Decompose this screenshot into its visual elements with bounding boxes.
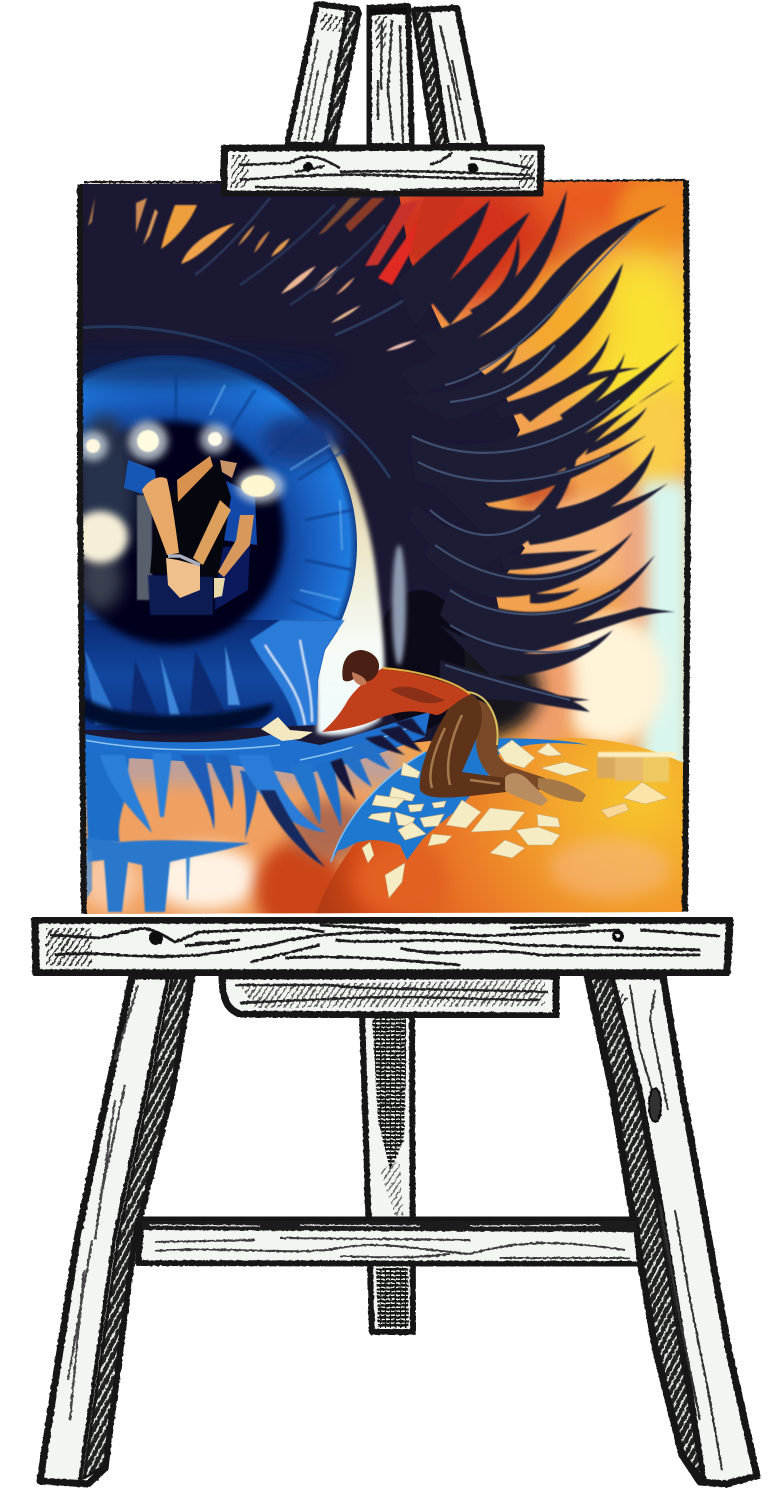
jeans (148, 575, 213, 615)
cuffed arm (142, 477, 179, 555)
iris (78, 346, 357, 732)
man: head (342, 650, 379, 681)
glare lights (72, 421, 284, 563)
globe with papers (316, 738, 684, 914)
easel: top left post (287, 4, 359, 145)
second figure: jeans (214, 545, 250, 610)
man: hand with cloth (261, 717, 313, 741)
crawling man (261, 650, 586, 806)
upper lid dark mass (70, 170, 525, 745)
painting background (78, 180, 686, 914)
easel: under shelf tray (222, 976, 556, 1016)
eyelashes (395, 190, 680, 712)
blue band and drips (84, 838, 250, 912)
hands (166, 558, 200, 598)
easel: left leg (40, 976, 192, 1484)
lower lid crease (80, 695, 273, 734)
other arm (193, 500, 231, 565)
man: near leg (420, 692, 506, 798)
lid rim highlight (392, 545, 406, 665)
lower lid skin (86, 784, 370, 914)
iris radial fibres (176, 375, 352, 620)
lower lid blue band (80, 712, 430, 775)
man: shoes (505, 773, 548, 806)
second figure: arm (218, 515, 254, 577)
easel: right post (414, 8, 485, 146)
easel: top clamp (224, 147, 541, 194)
sclera (316, 430, 384, 735)
paper sheets (362, 740, 668, 898)
second figure: blue shirt (222, 480, 257, 545)
easel: back center leg (362, 1012, 413, 1332)
blue sleeve (124, 460, 156, 494)
man: far leg (476, 700, 545, 790)
upper lid gaps showing background (88, 190, 470, 351)
globe: blue water (331, 738, 588, 862)
painting frame edges (80, 180, 688, 914)
lower lashes (84, 718, 428, 867)
upper lid lash strokes (80, 198, 418, 478)
pupil (60, 421, 284, 645)
lower iris streaks (85, 620, 345, 735)
glowing blocks (597, 752, 676, 782)
eyelash highlights (412, 220, 640, 700)
grey stripe (137, 495, 152, 600)
painting (30, 144, 734, 1018)
easel: main shelf (35, 920, 730, 973)
reflection in the pupil (72, 421, 284, 615)
easel: top center post (369, 6, 412, 146)
raised arm (177, 456, 213, 502)
easel: right leg (587, 976, 757, 1484)
easel: cross bar (138, 1219, 640, 1264)
man: torso and arm (322, 668, 470, 732)
handcuffs (168, 556, 200, 565)
black shirt (150, 463, 231, 578)
